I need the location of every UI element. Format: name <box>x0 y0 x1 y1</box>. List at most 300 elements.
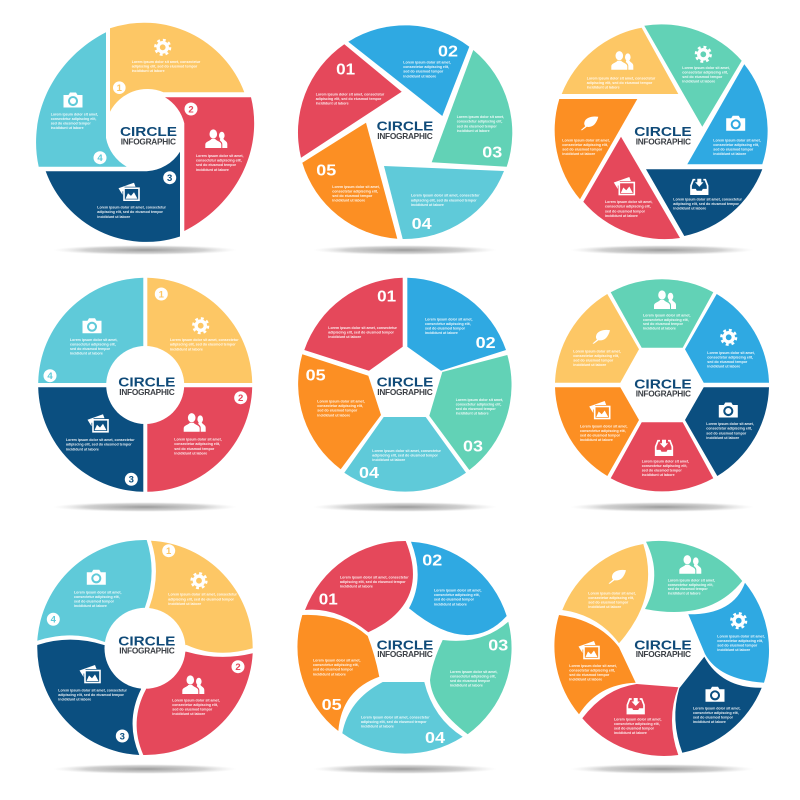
text block 05: Lorem ipsum dolor sit amet, <box>313 659 361 663</box>
text block yellow: Lorem ipsum dolor sit amet, <box>573 349 621 353</box>
text block yellow: incididunt ut labore <box>573 363 606 367</box>
text block navy: Lorem ipsum dolor sit amet, <box>706 422 754 426</box>
title: CIRCLE <box>634 637 692 652</box>
text block red: incididunt ut labore <box>605 214 638 218</box>
text block red: incididunt ut labore <box>614 731 647 735</box>
badge 3 <box>163 171 176 184</box>
text block 4: incididunt ut labore <box>70 352 103 356</box>
text block 04: adipiscing elit, sed do eiusmod tempor <box>361 720 427 724</box>
segment green <box>645 541 742 612</box>
text block 02: consectetur adipiscing elit, <box>425 322 471 326</box>
segment 4 teal <box>36 32 127 167</box>
icon: camera <box>82 318 102 333</box>
text block 04: incididunt ut labore <box>361 725 394 729</box>
text block 02: sed do eiusmod tempor <box>425 326 466 330</box>
title <box>118 634 176 655</box>
text block yellow: Lorem ipsum dolor sit amet, consectetur <box>587 76 656 80</box>
segment green <box>611 279 713 348</box>
wheel: 4 curved segments, bottom left <box>37 540 253 774</box>
text block green: consectetur adipiscing elit, <box>668 583 713 587</box>
text block 05: consectetur adipiscing elit, <box>313 663 359 667</box>
text block 2: incididunt ut labore <box>172 712 205 716</box>
wheel: 6 pinwheel segments, top right <box>555 24 768 255</box>
segment 01 red <box>304 278 403 371</box>
text block 3: adipiscing elit, sed do eiusmod tempor <box>97 210 164 214</box>
text block navy: sed do eiusmod tempor <box>706 431 747 435</box>
text block blue: consectetur adipiscing elit, <box>707 356 753 360</box>
text block 4: Lorem ipsum dolor sit amet, <box>51 113 98 117</box>
badge 1: 1 <box>166 546 172 557</box>
text block 3: adipiscing elit, sed do eiusmod tempor <box>66 443 132 447</box>
text block green: consectetur adipiscing elit, <box>643 318 689 322</box>
segment orange <box>555 99 637 199</box>
segment 04 teal <box>384 166 504 239</box>
icon: inbox <box>656 440 672 455</box>
segment blue <box>688 583 769 683</box>
text block orange: Lorem ipsum dolor sit amet, <box>580 425 628 429</box>
number 02: 02 <box>476 335 496 352</box>
text block 3: adipiscing elit, sed do eiusmod tempor <box>58 693 125 697</box>
segment 1 yellow <box>147 278 252 383</box>
text block 02: Lorem ipsum dolor sit amet, <box>403 61 451 65</box>
text block 03: sed do eiusmod tempor <box>457 124 497 128</box>
text block blue: incididunt ut labore <box>713 152 746 156</box>
text block red: Lorem ipsum dolor sit amet, <box>614 718 662 722</box>
number 03: 03 <box>463 439 483 456</box>
segment green <box>644 24 742 127</box>
text block 04: adipiscing elit, sed do eiusmod tempor <box>372 454 439 458</box>
text block 05: consectetur adipiscing elit, <box>317 404 363 408</box>
text block 05: Lorem ipsum dolor sit amet, <box>317 399 365 403</box>
title: CIRCLE <box>377 637 434 652</box>
segment 2 red <box>165 97 254 231</box>
icon: people <box>182 675 204 694</box>
text block 1: incididunt ut labore <box>168 602 201 606</box>
segment yellow <box>555 294 639 383</box>
icon: photo <box>80 665 100 682</box>
segment 05 orange <box>298 354 381 469</box>
text block navy: Lorem ipsum dolor sit amet, consectetur <box>673 197 743 201</box>
title <box>377 637 434 659</box>
icon: photo <box>589 401 610 418</box>
segment blue <box>687 64 768 164</box>
text block 1: incididunt ut labore <box>132 69 165 73</box>
text block 1: adipiscing elit, sed do eiusmod tempor <box>132 65 198 69</box>
text block blue: sed do eiusmod tempor <box>717 643 758 647</box>
text block green: incididunt ut labore <box>643 327 676 331</box>
icon: camera <box>726 116 745 131</box>
icon: camera <box>706 687 724 702</box>
text block 1: adipiscing elit, sed do eiusmod tempor <box>170 343 236 347</box>
text block orange: incididunt ut labore <box>569 678 602 682</box>
title: CIRCLE <box>120 124 177 139</box>
title: INFOGRAPHIC <box>377 387 433 397</box>
icon: camera <box>64 92 82 108</box>
text block yellow: consectetur adipiscing elit, <box>588 596 634 600</box>
text block 01: incididunt ut labore <box>316 102 349 106</box>
text block orange: sed do eiusmod tempor <box>580 434 621 438</box>
ground shadow <box>53 502 237 512</box>
icon: photo <box>88 414 108 432</box>
title <box>634 124 692 146</box>
number 02: 02 <box>422 553 442 570</box>
text block 4: incididunt ut labore <box>74 604 107 608</box>
text block green: sed do eiusmod tempor <box>643 322 684 326</box>
segment red <box>611 422 713 491</box>
icon: gear <box>696 47 711 62</box>
text block green: incididunt ut labore <box>682 80 715 84</box>
text block green: sed do eiusmod tempor <box>668 587 708 591</box>
wheel: 4 swirl segments, top left <box>36 23 254 255</box>
title <box>634 637 692 659</box>
text block blue: sed do eiusmod tempor <box>713 147 754 151</box>
text block 02: incididunt ut labore <box>403 74 436 78</box>
badge 2: 2 <box>238 393 243 404</box>
number 03: 03 <box>488 638 509 655</box>
text block 2: Lorem ipsum dolor sit amet, <box>174 438 222 442</box>
text block 01: incididunt ut labore <box>340 584 373 588</box>
badge 2 <box>184 102 198 116</box>
text block 02: sed do eiusmod tempor <box>403 70 444 74</box>
text block 04: Lorem ipsum dolor sit amet, consectetur <box>372 449 442 453</box>
number 04: 04 <box>412 216 432 233</box>
text block blue: Lorem ipsum dolor sit amet, <box>713 138 761 142</box>
badge 2: 2 <box>235 662 241 673</box>
text block blue: Lorem ipsum dolor sit amet, <box>707 351 755 355</box>
text block 03: sed do eiusmod tempor <box>456 407 496 411</box>
segment 4 teal <box>37 540 152 648</box>
text block 2: sed do eiusmod tempor <box>172 707 213 711</box>
text block 02: Lorem ipsum dolor sit amet, <box>425 318 473 322</box>
segment 01 red <box>305 541 413 632</box>
text block 4: consectetur adipiscing elit, <box>70 343 116 347</box>
badge 1: 1 <box>159 289 165 300</box>
segment 04 teal <box>344 417 466 492</box>
text block navy: sed do eiusmod tempor <box>693 716 734 720</box>
text block 05: incididunt ut labore <box>332 198 365 202</box>
segment 4 teal <box>38 278 143 383</box>
segment yellow <box>562 544 648 643</box>
text block 3: Lorem ipsum dolor sit amet, consectetur <box>66 438 135 442</box>
badge 2: 2 <box>188 104 194 115</box>
segment 1 yellow <box>145 541 253 653</box>
title: INFOGRAPHIC <box>377 649 433 659</box>
text block yellow: adipiscing elit, sed do eiusmod tempor <box>587 81 653 85</box>
icon: leaf <box>592 330 610 344</box>
text block 1: incididunt ut labore <box>170 347 203 351</box>
wheel: 6 hexagon segments, middle right <box>555 279 769 512</box>
icon: gear <box>155 40 170 55</box>
text block navy: incididunt ut labore <box>693 720 726 724</box>
text block 2: incididunt ut labore <box>196 168 229 172</box>
text block 03: Lorem ipsum dolor sit amet, <box>457 115 504 119</box>
segment yellow <box>562 28 678 94</box>
title: INFOGRAPHIC <box>636 388 691 398</box>
title: CIRCLE <box>118 375 176 390</box>
ground shadow <box>53 245 237 255</box>
title <box>377 118 434 141</box>
text block 03: Lorem ipsum dolor sit amet, <box>450 670 498 674</box>
icon: gear <box>731 613 746 628</box>
segment navy <box>675 657 762 753</box>
text block orange: incididunt ut labore <box>580 438 613 442</box>
text block 01: Lorem ipsum dolor sit amet, consectetur <box>340 575 409 579</box>
segment 05 orange <box>297 615 379 731</box>
text block red: consectetur adipiscing elit, <box>642 464 687 468</box>
wheel: 5 pinwheel segments, top middle <box>298 25 512 255</box>
title <box>634 376 692 398</box>
badge 2 <box>234 391 247 404</box>
center hub <box>106 346 184 424</box>
text block yellow: incididunt ut labore <box>587 86 620 90</box>
text block orange: consectetur adipiscing elit, <box>562 143 608 147</box>
title: INFOGRAPHIC <box>377 131 433 141</box>
segment navy <box>685 387 769 476</box>
icon: inbox <box>627 698 644 714</box>
icon: people <box>611 51 633 70</box>
text block 05: sed do eiusmod tempor <box>313 668 354 672</box>
text block yellow: Lorem ipsum dolor sit amet, <box>588 592 636 596</box>
icon: photo <box>614 177 634 194</box>
text block navy: adipiscing elit, sed do eiusmod tempor <box>673 202 740 206</box>
badge 3: 3 <box>167 173 172 184</box>
text block yellow: sed do eiusmod tempor <box>588 600 629 604</box>
icon: photo <box>578 641 599 658</box>
number 05: 05 <box>306 368 326 385</box>
text block green: sed do eiusmod tempor <box>682 75 723 79</box>
text block navy: incididunt ut labore <box>706 436 739 440</box>
text block 1: Lorem ipsum dolor sit amet, consectetur <box>132 60 201 64</box>
icon: gear <box>193 318 208 333</box>
text block 04: incididunt ut labore <box>411 203 444 207</box>
text block 03: sed do eiusmod tempor <box>450 679 491 683</box>
text block 4: sed do eiusmod tempor <box>74 599 115 603</box>
text block 01: adipiscing elit, sed do eiusmod tempor <box>340 580 406 584</box>
ground shadow <box>570 764 754 774</box>
segment 03 green <box>432 50 512 167</box>
text block 1: Lorem ipsum dolor sit amet, consectetur <box>168 593 238 597</box>
text block 2: sed do eiusmod tempor <box>174 447 215 451</box>
title: CIRCLE <box>377 375 434 390</box>
segment orange <box>555 387 639 476</box>
title: CIRCLE <box>377 118 434 133</box>
text block 2: consectetur adipiscing elit, <box>196 159 242 163</box>
text block blue: sed do eiusmod tempor <box>707 360 748 364</box>
text block navy: incididunt ut labore <box>673 206 706 210</box>
text block 4: sed do eiusmod tempor <box>51 122 91 126</box>
text block orange: Lorem ipsum dolor sit amet, <box>562 138 610 142</box>
text block 03: Lorem ipsum dolor sit amet, <box>456 398 503 402</box>
text block 02: consectetur adipiscing elit, <box>434 593 480 597</box>
segment 02 blue <box>348 25 469 116</box>
text block yellow: incididunt ut labore <box>588 605 621 609</box>
text block orange: Lorem ipsum dolor sit amet, <box>569 664 617 668</box>
wheel: 5 curved segments, bottom middle <box>297 541 512 774</box>
text block navy: Lorem ipsum dolor sit amet, <box>693 707 741 711</box>
segment 02 blue <box>409 542 507 635</box>
text block 03: incididunt ut labore <box>457 129 490 133</box>
segment 3 navy <box>38 387 143 492</box>
text block orange: incididunt ut labore <box>562 152 595 156</box>
text block 03: incididunt ut labore <box>456 412 489 416</box>
text block red: sed do eiusmod tempor <box>642 468 682 472</box>
text block red: incididunt ut labore <box>642 473 675 477</box>
text block 02: incididunt ut labore <box>425 331 458 335</box>
segment 03 green <box>429 355 512 470</box>
badge 4: 4 <box>97 153 103 164</box>
ground shadow <box>313 245 497 255</box>
segment 04 teal <box>342 682 463 754</box>
badge 1 <box>155 288 168 300</box>
segment 03 green <box>430 622 512 734</box>
number 03: 03 <box>482 144 503 161</box>
ground shadow <box>53 764 237 774</box>
text block green: Lorem ipsum dolor sit amet, <box>643 313 691 317</box>
badge 4 <box>44 369 56 382</box>
text block red: Lorem ipsum dolor sit amet, <box>642 459 689 463</box>
badge 4: 4 <box>51 615 57 626</box>
text block 3: Lorem ipsum dolor sit amet, consectetur <box>97 206 167 210</box>
text block blue: consectetur adipiscing elit, <box>717 639 763 643</box>
title <box>120 124 177 146</box>
text block green: consectetur adipiscing elit, <box>682 71 728 75</box>
text block green: Lorem ipsum dolor sit amet, <box>668 578 715 582</box>
badge 3 <box>116 730 129 742</box>
text block 01: Lorem ipsum dolor sit amet, consectetur <box>316 92 385 96</box>
badge 1 <box>162 544 175 557</box>
number 01: 01 <box>377 288 397 305</box>
text block 02: incididunt ut labore <box>434 602 467 606</box>
text block 3: Lorem ipsum dolor sit amet, consectetur <box>58 688 128 692</box>
text block 01: adipiscing elit, sed do eiusmod tempor <box>328 330 395 334</box>
title: INFOGRAPHIC <box>121 136 176 146</box>
badge 1: 1 <box>117 83 123 94</box>
title: CIRCLE <box>634 376 692 391</box>
text block yellow: consectetur adipiscing elit, <box>573 354 619 358</box>
text block 3: incididunt ut labore <box>97 215 130 219</box>
text block orange: consectetur adipiscing elit, <box>569 669 615 673</box>
segment red <box>583 137 680 239</box>
title <box>118 375 176 397</box>
text block 02: Lorem ipsum dolor sit amet, <box>434 589 482 593</box>
text block 03: consectetur adipiscing elit, <box>450 675 496 679</box>
text block red: sed do eiusmod tempor <box>614 726 655 730</box>
icon: gear <box>192 573 206 588</box>
text block navy: consectetur adipiscing elit, <box>706 427 752 431</box>
segment navy <box>646 169 762 236</box>
ground shadow <box>313 764 497 774</box>
segment orange <box>554 615 636 714</box>
text block 01: Lorem ipsum dolor sit amet, consectetur <box>328 326 398 330</box>
icon: photo <box>118 183 139 200</box>
text block 05: incididunt ut labore <box>317 413 350 417</box>
segment red <box>582 684 678 756</box>
text block yellow: sed do eiusmod tempor <box>573 358 614 362</box>
segment 1 yellow <box>110 23 244 112</box>
segment 05 orange <box>302 123 397 239</box>
icon: gear <box>721 330 736 345</box>
text block 04: Lorem ipsum dolor sit amet, consectetur <box>361 715 430 719</box>
text block 05: Lorem ipsum dolor sit amet, <box>332 185 380 189</box>
text block 03: consectetur adipiscing elit, <box>457 120 502 124</box>
text block 2: consectetur adipiscing elit, <box>172 703 218 707</box>
text block blue: consectetur adipiscing elit, <box>713 143 759 147</box>
title: INFOGRAPHIC <box>636 136 691 146</box>
text block 4: Lorem ipsum dolor sit amet, <box>70 338 118 342</box>
badge 1 <box>113 81 126 94</box>
badge 3: 3 <box>120 731 125 742</box>
text block 2: incididunt ut labore <box>174 451 207 455</box>
text block red: sed do eiusmod tempor <box>605 209 646 213</box>
title: INFOGRAPHIC <box>119 387 175 397</box>
text block orange: consectetur adipiscing elit, <box>580 429 626 433</box>
text block 05: consectetur adipiscing elit, <box>332 189 378 193</box>
text block blue: incididunt ut labore <box>707 365 740 369</box>
icon: people <box>184 413 206 432</box>
icon: people <box>654 290 676 309</box>
wheel: 5 pentagon segments, centre <box>298 278 512 512</box>
text block 03: consectetur adipiscing elit, <box>456 403 501 407</box>
badge 4 <box>94 151 106 164</box>
ground shadow <box>570 245 754 255</box>
text block 04: adipiscing elit, sed do eiusmod tempor <box>411 198 477 202</box>
text block 2: sed do eiusmod tempor <box>196 163 237 167</box>
icon: inbox <box>691 179 708 194</box>
text block blue: incididunt ut labore <box>717 648 750 652</box>
ground shadow <box>570 502 754 512</box>
title: INFOGRAPHIC <box>636 649 691 659</box>
segment 2 red <box>147 387 252 492</box>
text block 2: Lorem ipsum dolor sit amet, <box>172 698 220 702</box>
icon: people <box>205 129 227 148</box>
text block 02: consectetur adipiscing elit, <box>403 65 449 69</box>
text block 03: incididunt ut labore <box>450 684 483 688</box>
wheel: 4 quadrants, middle left <box>38 278 252 512</box>
badge 3 <box>125 473 138 486</box>
number 04: 04 <box>425 730 445 747</box>
number 01: 01 <box>319 592 338 609</box>
number 02: 02 <box>438 43 458 60</box>
badge 4 <box>47 613 60 626</box>
text block 05: incididunt ut labore <box>313 672 346 676</box>
center hub <box>104 608 186 689</box>
badge 3: 3 <box>129 475 134 486</box>
text block 1: Lorem ipsum dolor sit amet, consectetur <box>170 338 239 342</box>
number 01: 01 <box>336 62 356 79</box>
badge 4: 4 <box>47 371 53 382</box>
icon: leaf <box>581 117 598 130</box>
text block 2: consectetur adipiscing elit, <box>174 442 220 446</box>
text block red: consectetur adipiscing elit, <box>605 205 651 209</box>
text block 05: sed do eiusmod tempor <box>317 409 358 413</box>
icon: people <box>679 555 701 574</box>
text block 3: incididunt ut labore <box>66 447 99 451</box>
text block 4: sed do eiusmod tempor <box>70 347 111 351</box>
segment 3 navy <box>46 152 180 242</box>
segment blue <box>685 294 769 383</box>
text block green: incididunt ut labore <box>668 592 701 596</box>
text block 01: adipiscing elit, sed do eiusmod tempor <box>316 97 382 101</box>
text block 4: incididunt ut labore <box>51 126 84 130</box>
segment 01 red <box>298 44 402 158</box>
text block blue: Lorem ipsum dolor sit amet, <box>717 634 765 638</box>
ground shadow <box>313 502 497 512</box>
icon: camera <box>87 570 106 585</box>
text block 05: sed do eiusmod tempor <box>332 194 373 198</box>
number 05: 05 <box>316 163 337 180</box>
text block 02: sed do eiusmod tempor <box>434 598 475 602</box>
text block green: Lorem ipsum dolor sit amet, <box>682 66 730 70</box>
